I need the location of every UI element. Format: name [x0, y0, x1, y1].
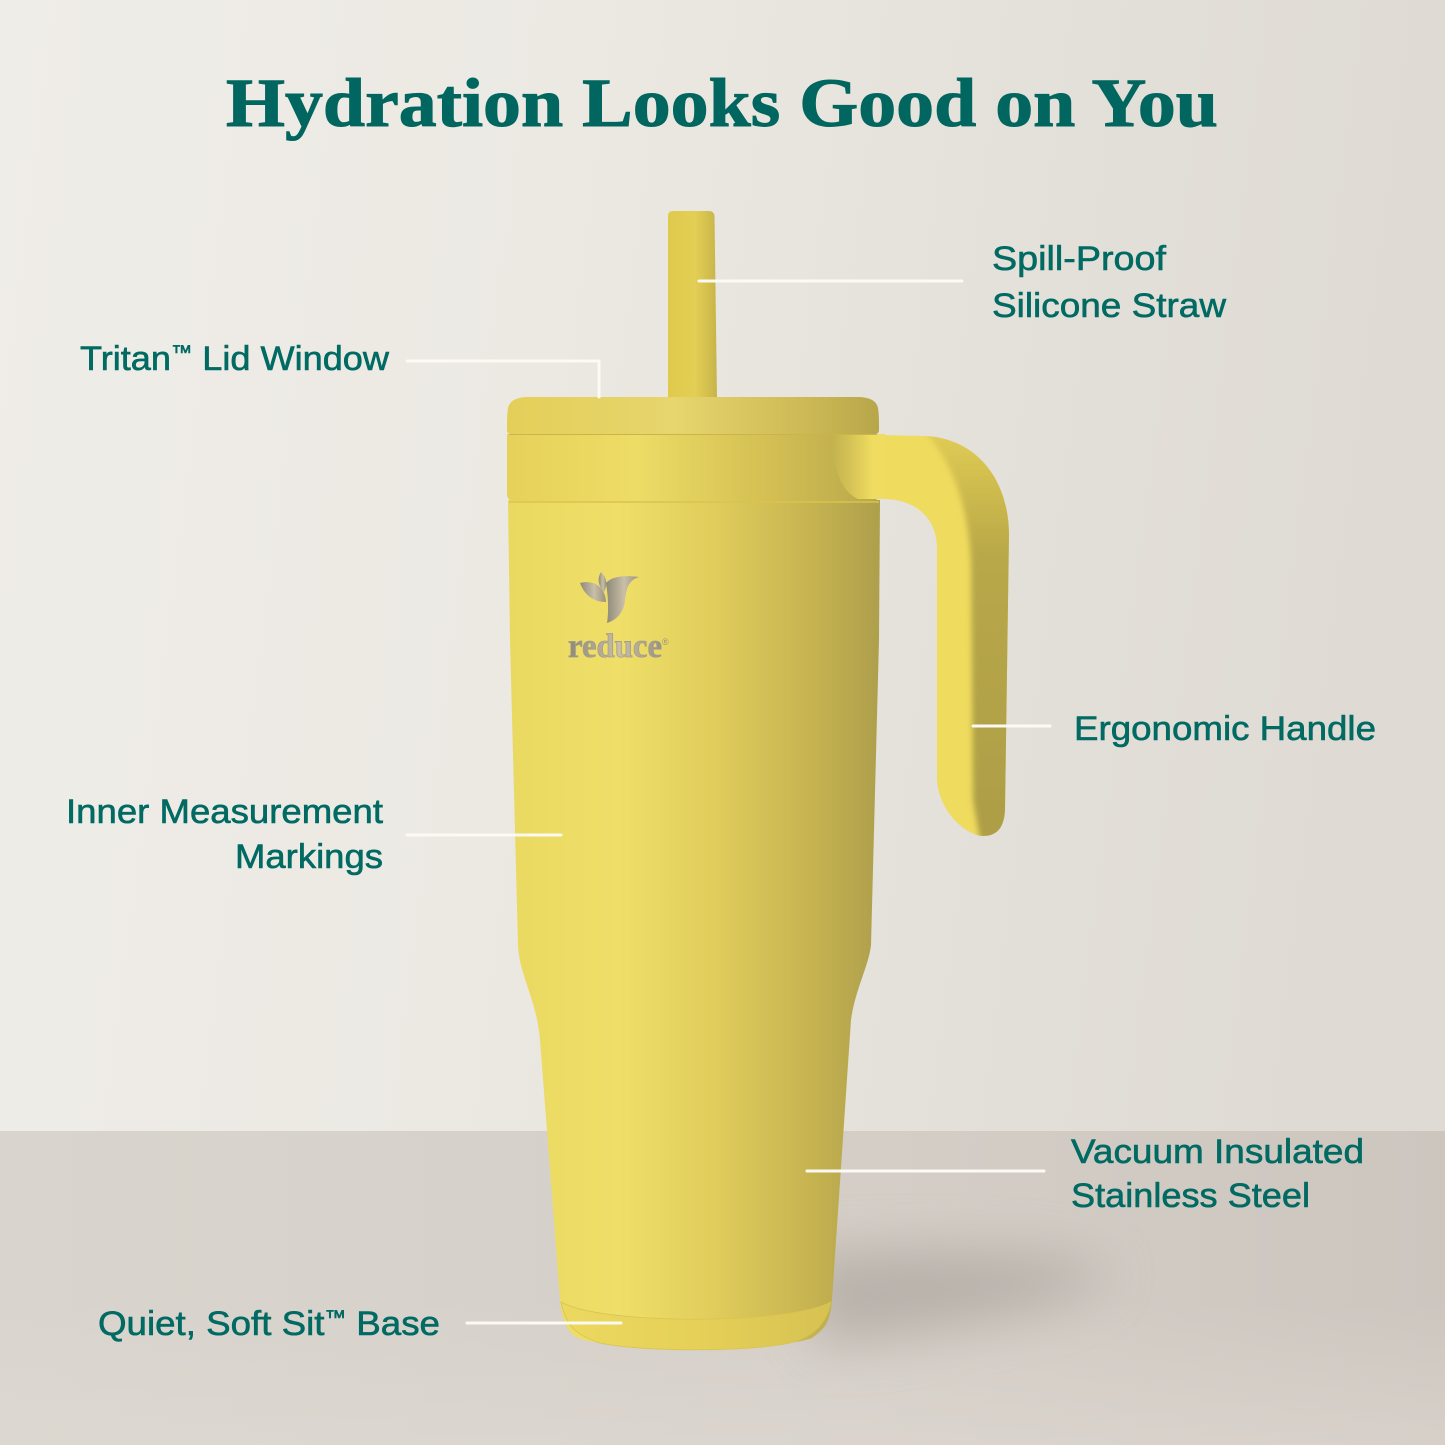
- collar: [507, 434, 879, 501]
- logo registered mark: ®: [662, 637, 669, 647]
- callout: ergonomic handle: Ergonomic Handle: [1074, 710, 1376, 748]
- callout: quiet soft sit base: [98, 1305, 621, 1343]
- logo mark: [580, 572, 639, 623]
- callout: quiet soft sit base: Base: [346, 1305, 440, 1343]
- callout: inner measurement markings: [66, 793, 561, 876]
- handle: [885, 435, 1009, 836]
- callout: spill-proof silicone straw: Silicone Straw: [992, 287, 1226, 325]
- tumbler illustration: [507, 211, 1015, 1350]
- callout: inner measurement markings: Inner Measurement: [66, 793, 384, 831]
- callout: vacuum insulated stainless steel: [807, 1133, 1364, 1215]
- callout: spill-proof silicone straw: [699, 240, 1226, 325]
- base ring: [561, 1302, 831, 1350]
- handle arm over collar: [832, 434, 885, 499]
- callout: tritan lid window: Tritan: [80, 340, 166, 378]
- callout: tritan lid window: [80, 340, 599, 397]
- collar seam: [509, 501, 879, 503]
- logo wordmark: reduce: [568, 628, 662, 665]
- straw: [668, 211, 717, 398]
- tumbler cast shadow: [800, 1250, 1110, 1345]
- logo: [568, 572, 669, 665]
- callout: vacuum insulated stainless steel: Stainless Steel: [1071, 1177, 1310, 1215]
- callout: quiet soft sit base: ™: [325, 1307, 346, 1329]
- title: Hydration Looks Good on You: [226, 65, 1218, 141]
- floor: [0, 1131, 1445, 1445]
- callout: tritan lid window: ™: [171, 342, 192, 364]
- callout: inner measurement markings: Markings: [235, 838, 383, 876]
- callout: vacuum insulated stainless steel: Vacuum Insulated: [1071, 1133, 1364, 1171]
- callout: spill-proof silicone straw: Spill-Proof: [992, 240, 1167, 278]
- lid seam: [509, 434, 877, 436]
- callout: quiet soft sit base: Quiet, Soft Sit: [98, 1305, 308, 1343]
- callout: tritan lid window: Lid Window: [192, 340, 389, 378]
- tumbler body: [508, 500, 880, 1348]
- lid: [507, 397, 879, 434]
- background wall: [0, 0, 1445, 1131]
